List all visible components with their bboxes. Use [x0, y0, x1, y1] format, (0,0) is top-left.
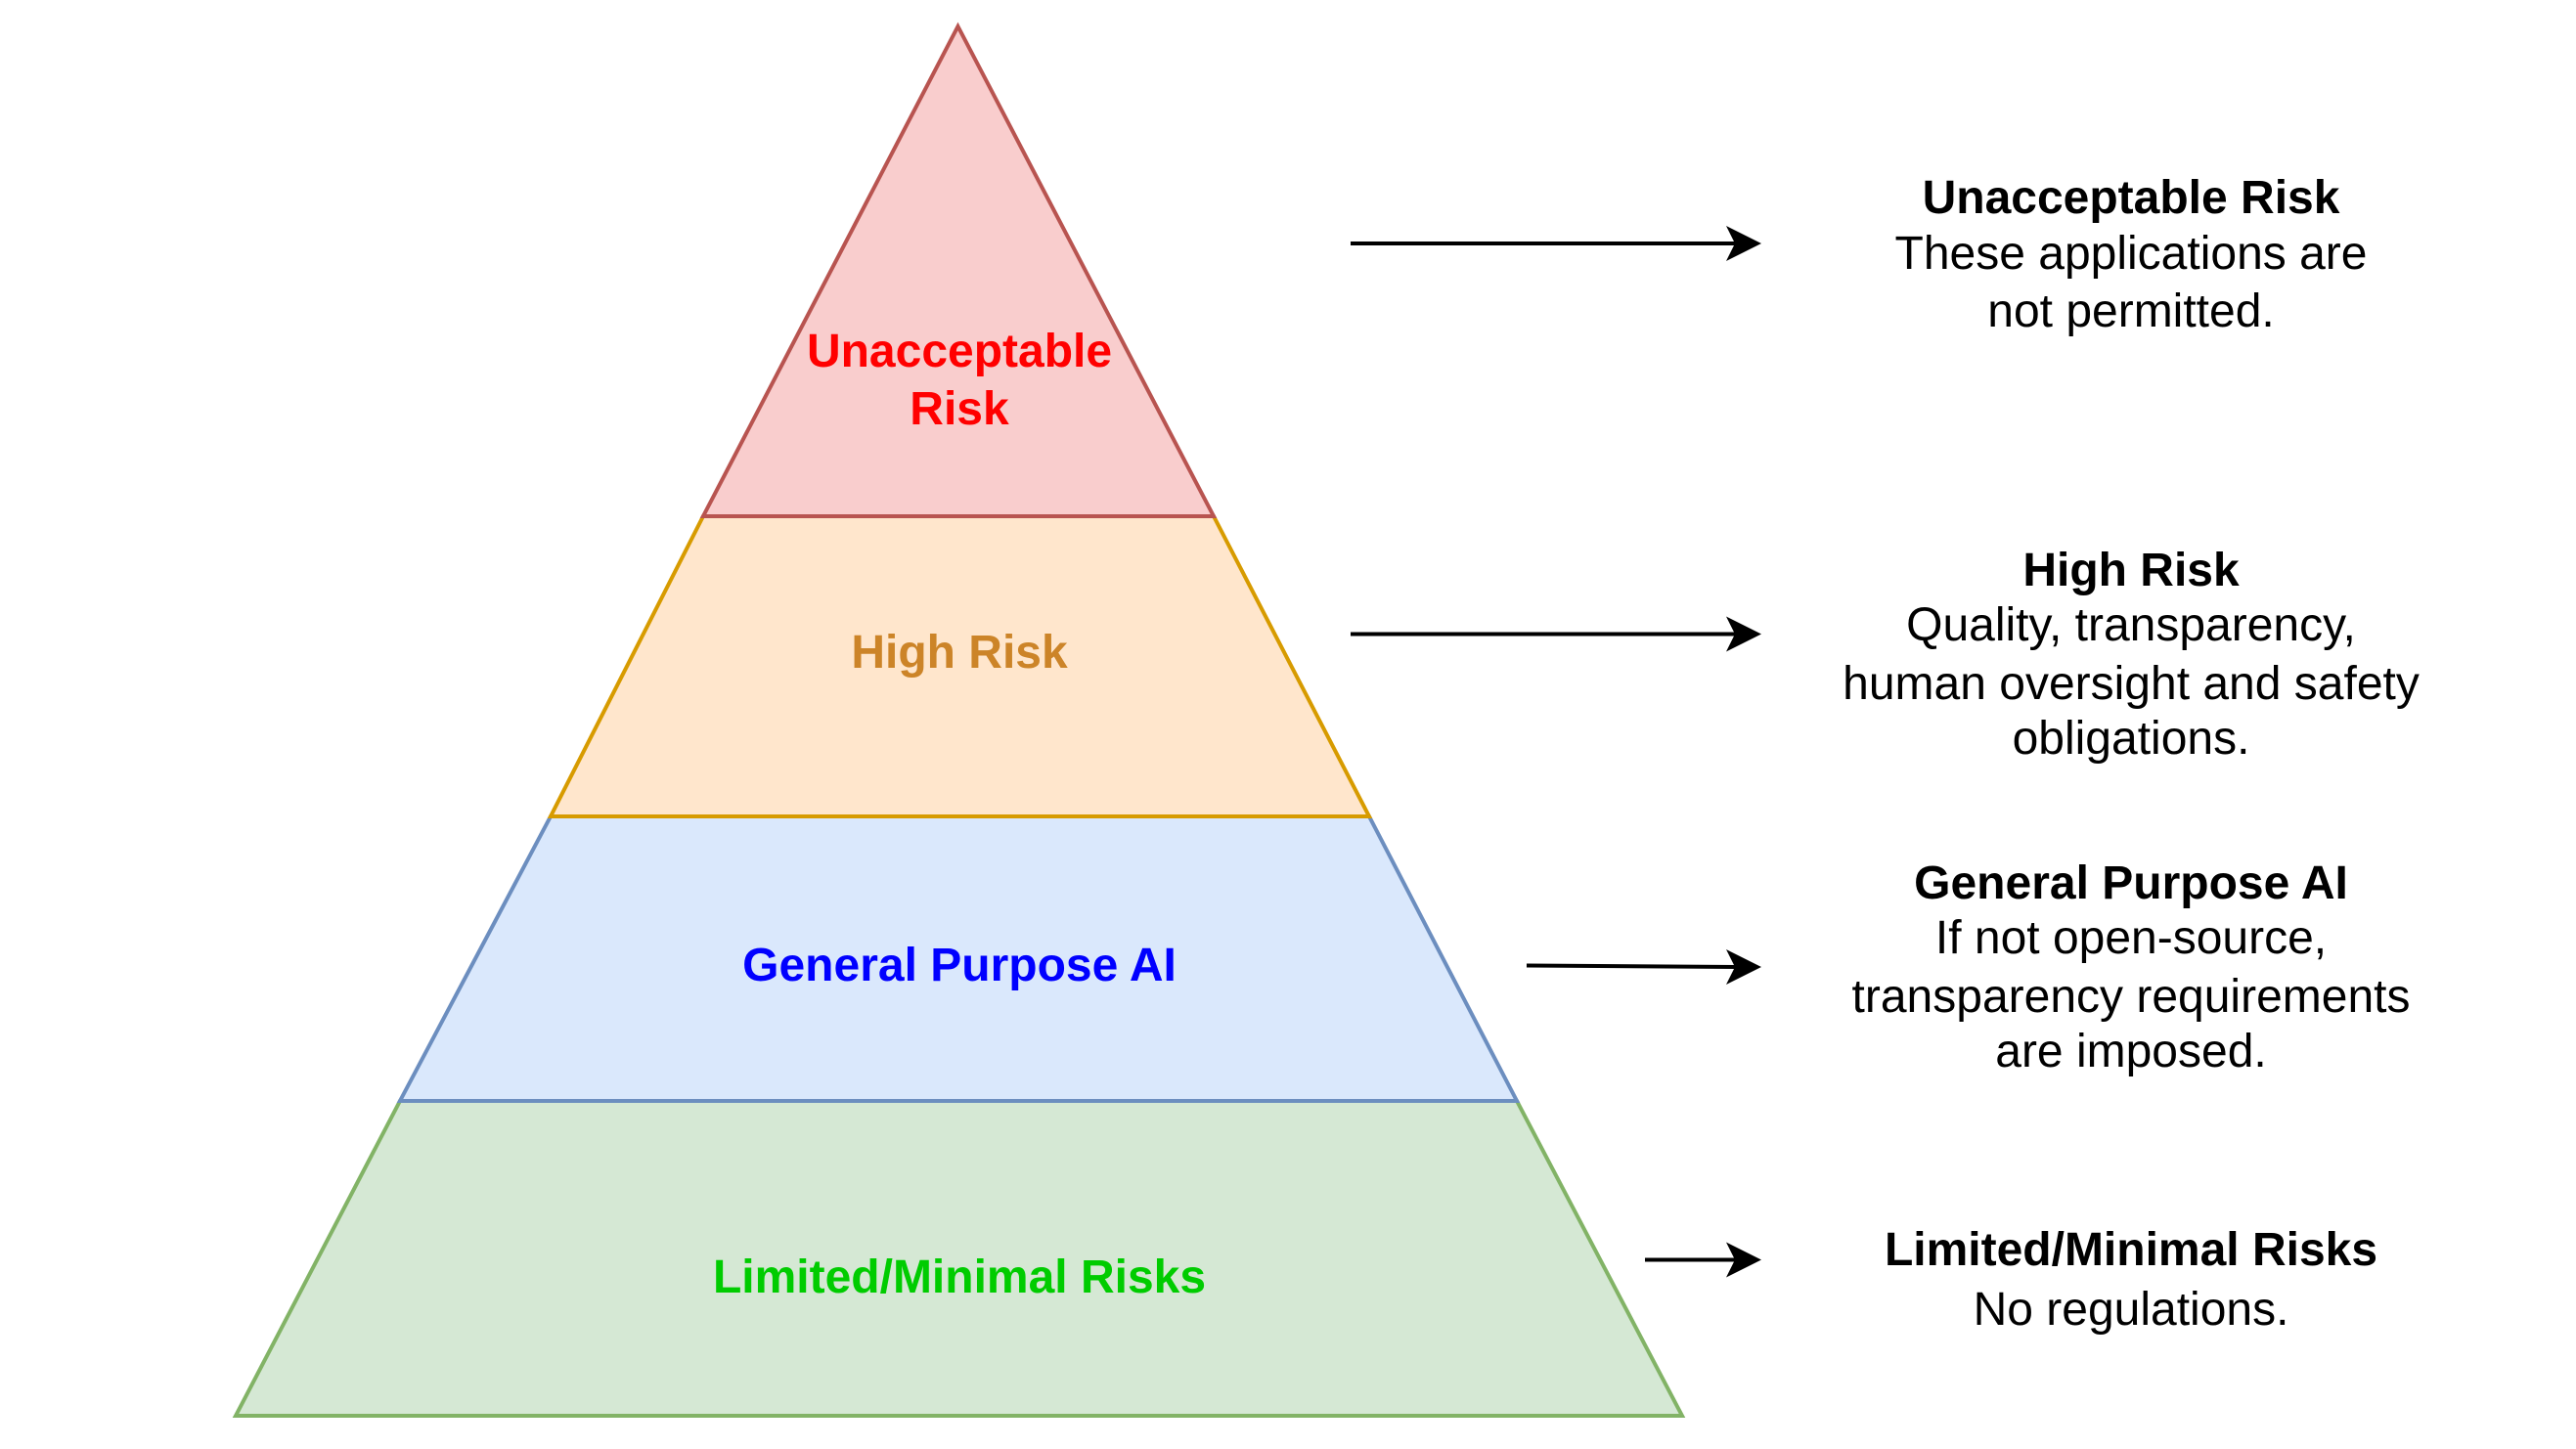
- description: unacceptable risk: not permitted.: [1987, 285, 2275, 337]
- description: general purpose AI: General Purpose AI: [1914, 857, 2348, 909]
- description: high risk: obligations.: [2013, 713, 2249, 765]
- tier label: general purpose AI: General Purpose AI: [742, 940, 1177, 991]
- description: unacceptable risk: Unacceptable Risk: [1923, 172, 2340, 224]
- pyramid tier: general purpose AI: [400, 816, 1517, 1101]
- description: high risk: human oversight and safety: [1843, 658, 2420, 710]
- description: general purpose AI: If not open-source,: [1935, 912, 2327, 964]
- arrow: high risk: [1351, 616, 1761, 651]
- pyramid tier: unacceptable risk: [703, 26, 1214, 516]
- arrow: general purpose AI: [1527, 949, 1761, 985]
- description: general purpose AI: transparency requirements: [1852, 971, 2410, 1023]
- arrow: limited/minimal risks: [1645, 1242, 1761, 1277]
- tier label: unacceptable risk: Risk: [910, 383, 1009, 435]
- description: limited/minimal risks: No regulations.: [1974, 1284, 2288, 1336]
- description: limited/minimal risks: Limited/Minimal Risks: [1885, 1224, 2377, 1276]
- description: unacceptable risk: These applications are: [1895, 228, 2367, 280]
- tier label: high risk: High Risk: [851, 627, 1068, 679]
- arrow: unacceptable risk: [1351, 226, 1761, 261]
- pyramid tier: limited/minimal risks: [236, 1101, 1682, 1416]
- description: high risk: High Risk: [2022, 545, 2240, 596]
- tier label: limited/minimal risks: Limited/Minimal Risks: [713, 1251, 1206, 1303]
- tier label: unacceptable risk: Unacceptable: [807, 326, 1112, 377]
- pyramid tier: high risk: [551, 516, 1369, 816]
- description: high risk: Quality, transparency,: [1906, 599, 2356, 651]
- description: general purpose AI: are imposed.: [1995, 1026, 2267, 1077]
